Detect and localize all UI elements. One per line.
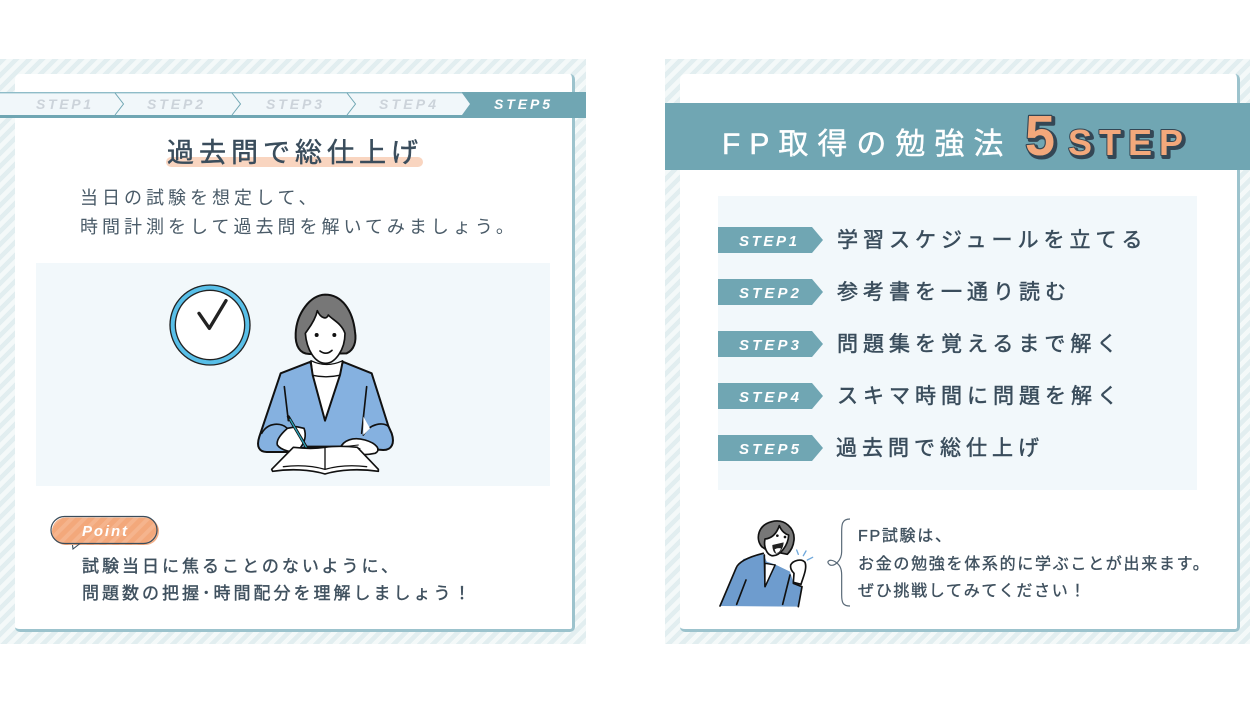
step 4 <box>718 383 1123 409</box>
step 4: スキマ時間に問題を解く <box>837 385 1123 408</box>
step progress bar <box>0 92 586 118</box>
illustration: woman <box>258 295 393 474</box>
step 1 <box>718 227 1148 253</box>
illustration: clock and woman studying <box>169 284 394 475</box>
step 4: STEP4 <box>739 389 800 406</box>
heading: 過去問で総仕上げ <box>167 138 423 168</box>
white card left <box>15 74 575 632</box>
step list <box>718 227 1148 461</box>
step 3: 問題集を覚えるまで解く <box>837 333 1122 356</box>
banner 5 STEP <box>1025 104 1186 170</box>
panel: five step overview <box>665 59 1250 644</box>
intro text: 時間計測をして過去問を解いてみましょう。 <box>80 217 518 237</box>
banner title: FP取得の勉強法 <box>722 128 1012 161</box>
closing message: FP試験は、 <box>858 528 953 545</box>
step progress bar: STEP2 <box>147 96 203 112</box>
hatched background left <box>0 59 586 644</box>
icon: clock with check mark <box>169 284 251 366</box>
banner 5 STEP: 5 <box>1025 104 1055 168</box>
step progress bar: STEP5 <box>494 96 550 112</box>
banner 5 STEP: 5 <box>1027 106 1057 170</box>
panel: step 5 detail <box>0 59 586 644</box>
step 3: STEP3 <box>739 337 800 354</box>
banner <box>665 103 1250 170</box>
closing message <box>858 527 1210 600</box>
point text <box>82 557 474 603</box>
intro text <box>80 188 518 237</box>
illustration: cheering person <box>719 520 814 608</box>
step 2: STEP2 <box>739 285 800 302</box>
closing message: ぜひ挑戦してみてください！ <box>858 583 1087 600</box>
point text: 試験当日に焦ることのないように、 <box>82 557 401 576</box>
intro text: 当日の試験を想定して、 <box>80 188 321 208</box>
step progress bar: STEP3 <box>266 96 322 112</box>
banner 5 STEP: STEP <box>1068 122 1183 163</box>
banner 5 STEP: STEP <box>1070 124 1185 165</box>
brace <box>827 518 850 607</box>
point badge: Point <box>82 523 128 540</box>
white card right <box>680 74 1240 632</box>
steps panel <box>718 196 1197 490</box>
closing message: お金の勉強を体系的に学ぶことが出来ます。 <box>858 556 1210 572</box>
step progress bar: STEP4 <box>379 96 436 112</box>
step 1: 学習スケジュールを立てる <box>837 229 1148 252</box>
step 5: STEP5 <box>739 441 800 458</box>
step 2: 参考書を一通り読む <box>837 281 1071 304</box>
illustration panel <box>36 263 550 486</box>
step progress bar: STEP1 <box>36 96 91 112</box>
point badge <box>50 516 159 550</box>
step 5 <box>718 435 1044 461</box>
step 5: 過去問で総仕上げ <box>836 437 1044 460</box>
step 1: STEP1 <box>739 233 797 250</box>
step 3 <box>718 331 1122 357</box>
point text: 問題数の把握･時間配分を理解しましょう！ <box>82 584 474 603</box>
hatched background right <box>665 59 1250 644</box>
step 2 <box>718 279 1071 305</box>
title highlight <box>166 157 423 167</box>
